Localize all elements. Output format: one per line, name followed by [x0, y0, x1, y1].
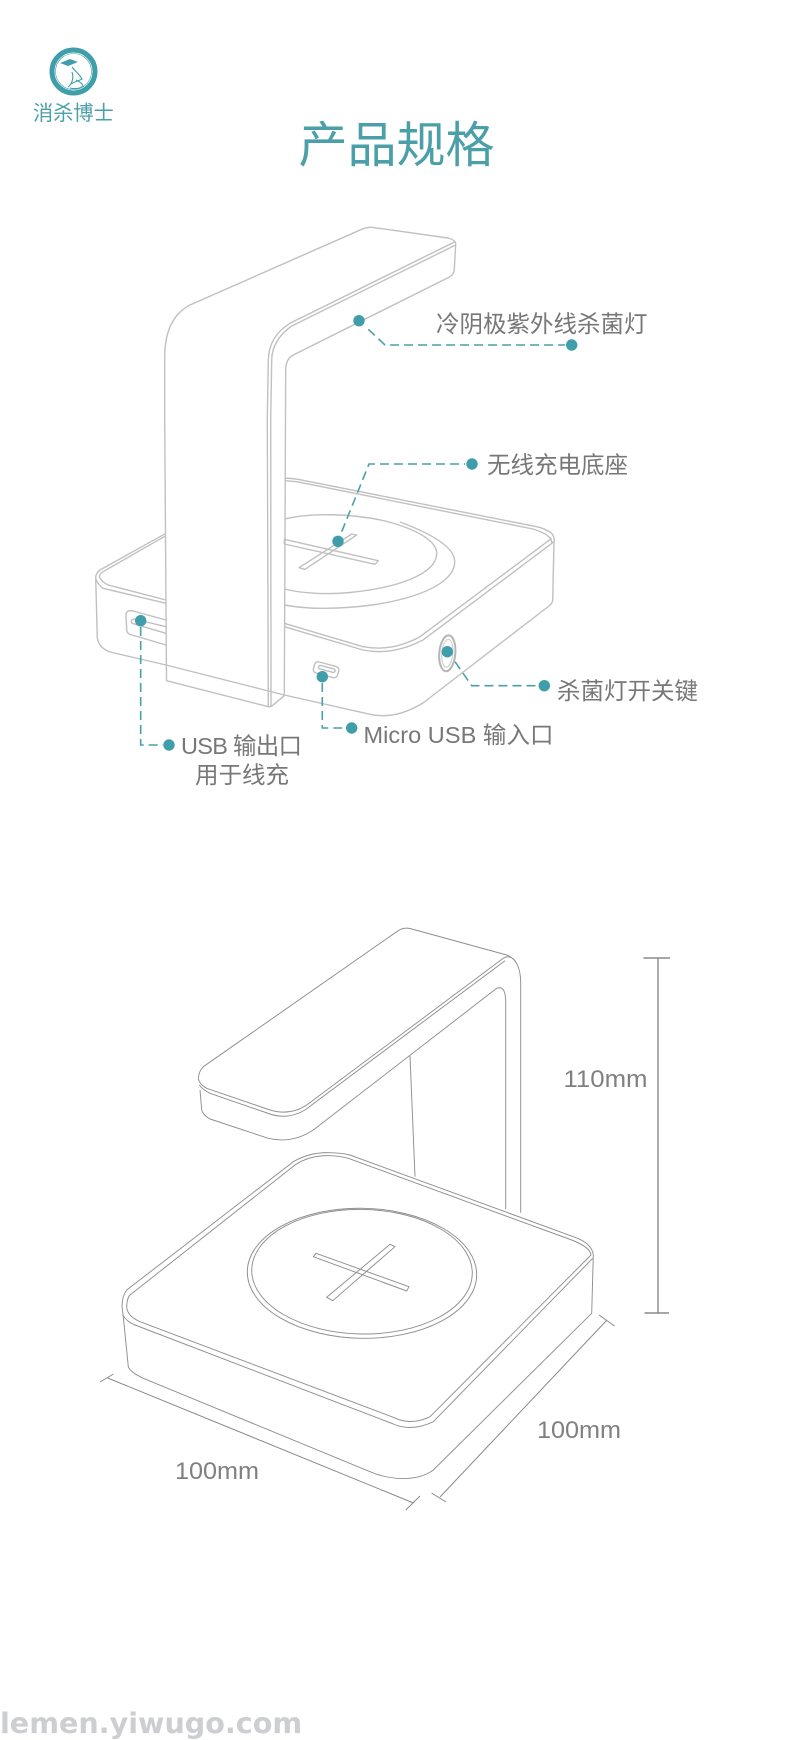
base unit	[96, 478, 554, 716]
micro USB port	[313, 661, 340, 679]
height dimension	[564, 958, 670, 1313]
callout: micro USB input: Micro USB 输入口	[364, 722, 554, 748]
callout: USB output: 用于线充	[195, 762, 289, 788]
watermark: lemen.yiwugo.com	[0, 1706, 302, 1740]
base outline	[122, 1153, 593, 1479]
callout: micro USB input	[317, 671, 554, 748]
title: 产品规格	[298, 119, 495, 173]
product diagram: dimensions	[100, 928, 670, 1510]
lamp outline	[198, 928, 521, 1213]
USB output port	[126, 611, 166, 645]
depth dimension: 100mm	[537, 1417, 621, 1444]
width dimension: 100mm	[175, 1458, 259, 1485]
charging pad	[284, 515, 455, 608]
callout: USB output	[135, 615, 302, 788]
callout: UV lamp: 冷阴极紫外线杀菌灯	[436, 311, 648, 337]
logo: 消杀博士	[33, 102, 114, 125]
depth dimension	[432, 1315, 621, 1502]
callout: wireless charging base	[332, 452, 628, 547]
callout: lamp switch	[442, 646, 698, 704]
callout: UV lamp	[353, 311, 648, 351]
product diagram: labelled features	[96, 227, 698, 788]
charging pad	[246, 1206, 478, 1340]
UV lamp tower	[165, 227, 456, 707]
callout: wireless charging base: 无线充电底座	[487, 452, 628, 478]
callout: lamp switch: 杀菌灯开关键	[557, 678, 698, 704]
width dimension	[100, 1374, 420, 1510]
logo	[33, 50, 114, 125]
switch button	[438, 635, 457, 672]
callout: USB output: USB 输出口	[181, 733, 302, 759]
height dimension: 110mm	[564, 1066, 648, 1093]
